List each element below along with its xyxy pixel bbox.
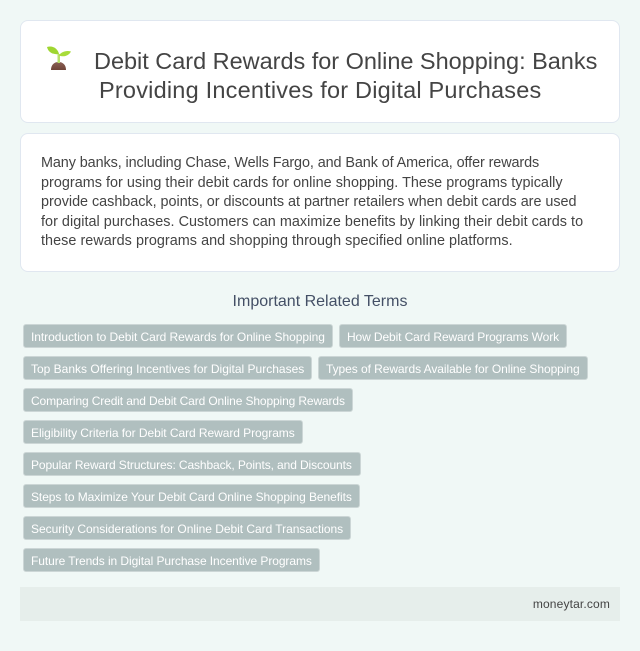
footer source: moneytar.com [533, 597, 610, 611]
tag: How Debit Card Reward Programs Work [347, 330, 559, 344]
tag list [23, 324, 588, 572]
description text [41, 155, 583, 249]
description text: programs for using their debit cards for online shopping. These programs typically [41, 175, 563, 191]
footer bar [20, 587, 620, 621]
description text: for digital purchases. Customers can maximize benefits by linking their debit cards to [41, 214, 583, 230]
description text: these rewards programs and shopping through specified online platforms. [41, 233, 513, 249]
panel: title card [20, 20, 620, 123]
description text: Many banks, including Chase, Wells Fargo, and Bank of America, offer rewards [41, 155, 539, 171]
tag [23, 356, 312, 380]
panel: title card: Debit Card Rewards for Online Shopping: Banks [94, 48, 597, 74]
tag [23, 452, 361, 476]
description text: provide cashback, points, or discounts at partner retailers when debit cards are used [41, 194, 577, 210]
tag [23, 388, 353, 412]
tag [318, 356, 588, 380]
icon: seedling [47, 46, 71, 70]
tag [23, 548, 320, 572]
tag: Popular Reward Structures: Cashback, Points, and Discounts [31, 458, 352, 472]
tag: Top Banks Offering Incentives for Digital Purchases [31, 362, 304, 376]
tag [23, 324, 333, 348]
tag: Introduction to Debit Card Rewards for Online Shopping [31, 330, 325, 344]
tag: Security Considerations for Online Debit Card Transactions [31, 522, 343, 536]
tag: Future Trends in Digital Purchase Incentive Programs [31, 554, 312, 568]
tag [23, 484, 360, 508]
heading: related terms: Important Related Terms [233, 293, 407, 310]
tag [23, 420, 303, 444]
tag: Types of Rewards Available for Online Shopping [326, 362, 580, 376]
tag: Steps to Maximize Your Debit Card Online Shopping Benefits [31, 490, 352, 504]
panel: description [20, 133, 620, 272]
tag: Comparing Credit and Debit Card Online Shopping Rewards [31, 394, 345, 408]
tag [23, 516, 351, 540]
panel: title card: Providing Incentives for Digital Purchases [99, 77, 541, 103]
tag: Eligibility Criteria for Debit Card Reward Programs [31, 426, 295, 440]
title [94, 48, 597, 103]
tag [339, 324, 567, 348]
